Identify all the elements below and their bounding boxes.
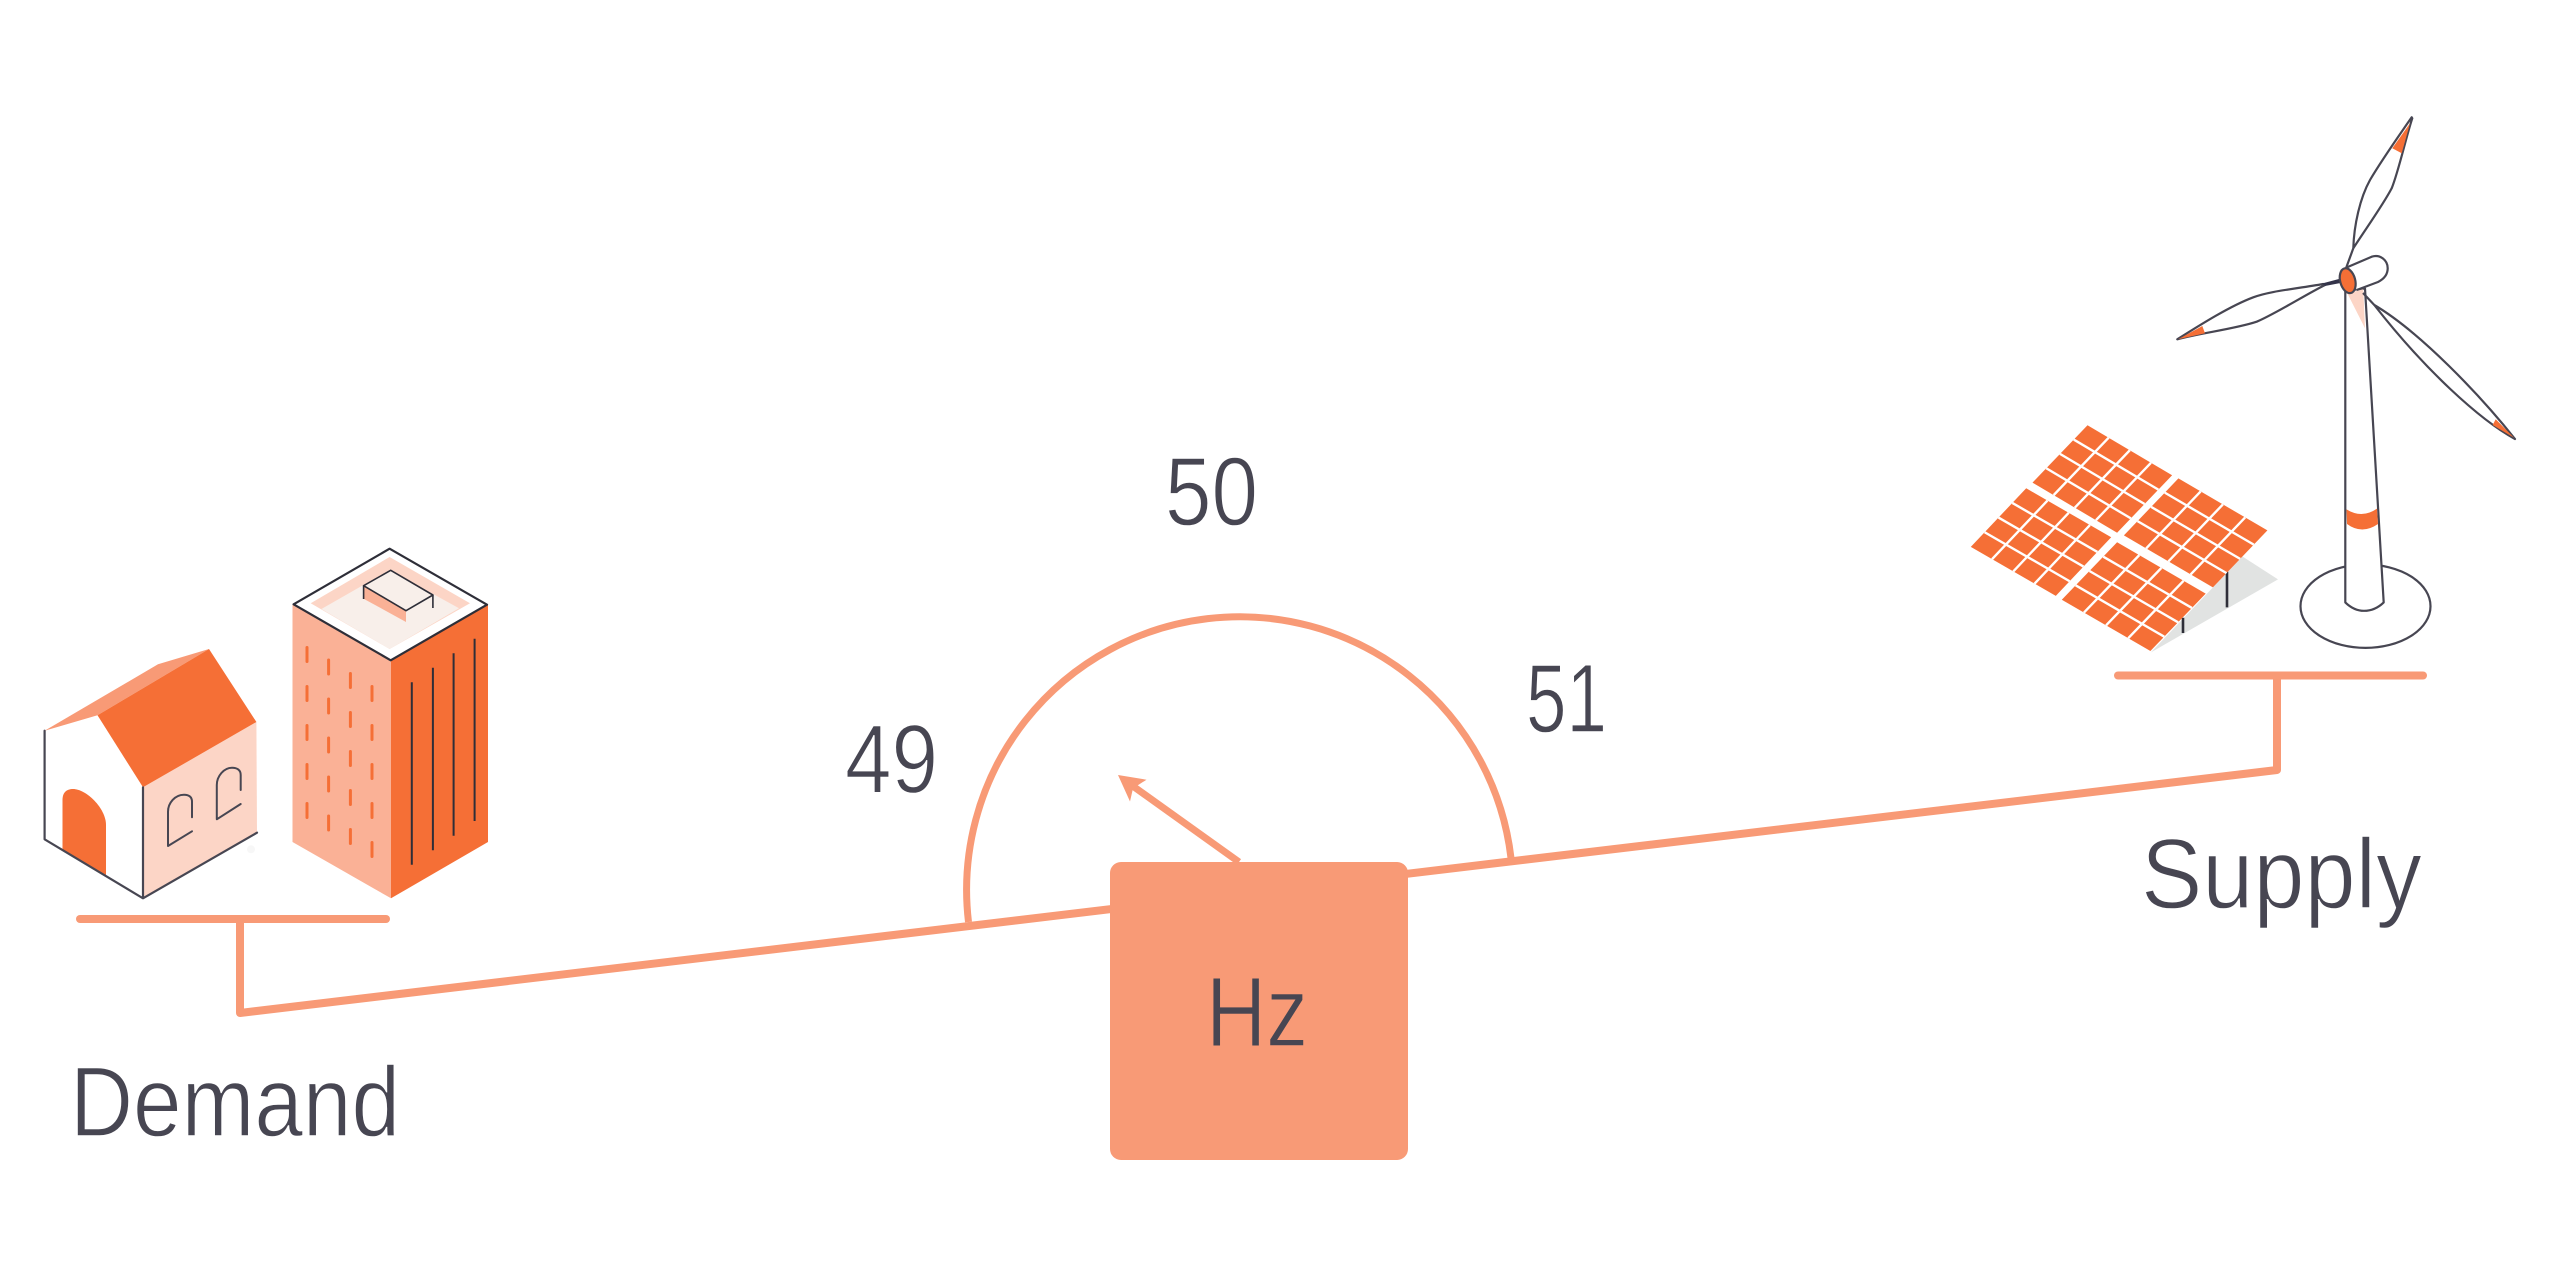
icon: house: [45, 649, 257, 898]
tower right face: [391, 604, 488, 898]
nacelle shadow: [2347, 289, 2365, 328]
tower left windows: [307, 648, 372, 856]
icon: apartment tower: [292, 549, 488, 898]
house outline: [45, 731, 257, 898]
Demand label: Demand: [70, 1046, 400, 1157]
seesaw beam linking demand and supply: [240, 676, 2277, 1013]
gauge needle arrow: [1118, 775, 1239, 862]
solar panel bottom left: [1971, 488, 2111, 596]
solar panel bottom right: [2062, 542, 2206, 651]
gauge label 51: 51: [1526, 644, 1607, 753]
solar panel top right: [2124, 478, 2267, 587]
Hz box: [1110, 862, 1408, 1160]
Hz label: Hz: [1206, 956, 1308, 1067]
frequency gauge arc: [967, 617, 1511, 922]
supply platform: [2114, 672, 2427, 680]
demand platform: [76, 915, 390, 923]
roof inset: [311, 557, 470, 649]
gauge label 50: 50: [1165, 437, 1258, 546]
icon: wind turbine: [2177, 117, 2515, 648]
nacelle: [2346, 256, 2388, 290]
house roof near slope: [98, 649, 256, 787]
tower right window lines: [412, 639, 475, 865]
house window right: [217, 768, 241, 819]
tower orange band: [2346, 509, 2378, 530]
house side wall: [143, 722, 257, 898]
solar panel shadow: [2151, 556, 2278, 652]
blade left: [2177, 278, 2342, 339]
solar panel legs: [2183, 572, 2227, 633]
Supply label: Supply: [2141, 818, 2422, 929]
tower roof: [294, 549, 487, 660]
turbine base: [2300, 564, 2430, 648]
gauge label 49: 49: [845, 704, 938, 813]
icon: solar panel array: [1971, 425, 2278, 652]
turbine hub: [2337, 266, 2358, 295]
turbine tower: [2345, 289, 2384, 611]
blade right: [2363, 293, 2515, 439]
house door: [62, 789, 106, 875]
rooftop box: [364, 570, 433, 622]
house roof far slope: [45, 649, 209, 731]
blade up: [2346, 117, 2412, 268]
house window left: [168, 795, 192, 846]
house gable wall: [45, 715, 143, 898]
solar panel top left: [2032, 425, 2172, 533]
tower left face: [292, 604, 391, 898]
